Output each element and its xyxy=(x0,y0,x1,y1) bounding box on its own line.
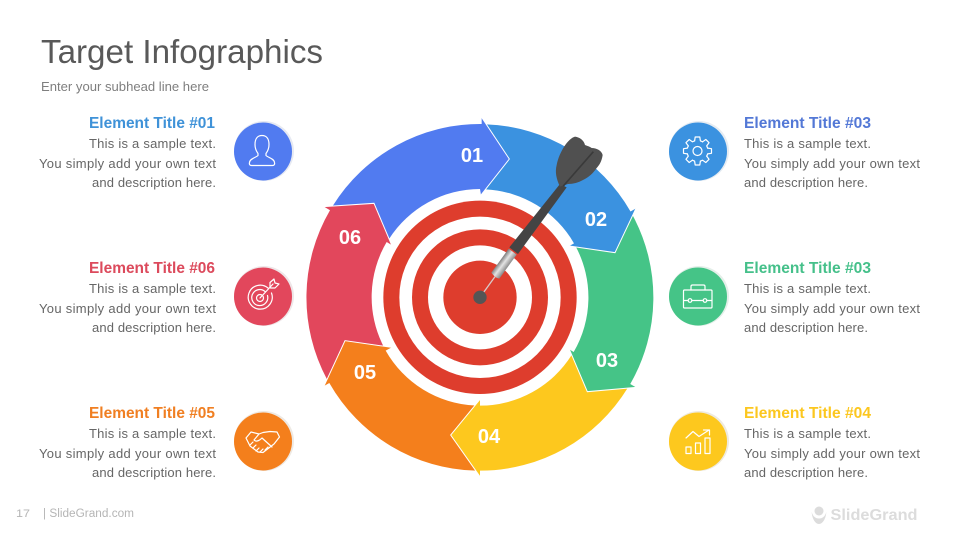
body text 04: You simply add your own text xyxy=(744,446,920,461)
body text 05: You simply add your own text xyxy=(39,446,216,461)
panel: element 03 blue xyxy=(669,115,920,190)
icon: gear xyxy=(669,121,729,181)
body text 03 green: and description here. xyxy=(744,320,868,335)
icon: target xyxy=(234,266,294,326)
body text 01: This is a sample text. xyxy=(89,136,216,151)
body text 04: This is a sample text. xyxy=(744,426,871,441)
segment numbers: 04 xyxy=(478,426,501,448)
footer: page number: 17 xyxy=(16,508,30,520)
arrow segment 05 xyxy=(324,341,476,471)
heading 06: Element Title #06 xyxy=(89,260,215,277)
body text 06: This is a sample text. xyxy=(89,281,216,296)
footer: logo: SlideGrand xyxy=(830,507,918,524)
panel: element 06 xyxy=(39,260,294,335)
body text 03 blue: This is a sample text. xyxy=(744,136,871,151)
footer: site name: | SlideGrand.com xyxy=(43,508,134,520)
panel: element 05 xyxy=(39,405,294,480)
dart xyxy=(473,137,603,304)
icon: handshake xyxy=(234,411,294,471)
target diagram xyxy=(306,117,653,477)
body text 03 blue: and description here. xyxy=(744,175,868,190)
segment numbers: 06 xyxy=(339,227,361,249)
panel: element 01 xyxy=(39,115,294,190)
body text 03 green xyxy=(744,281,920,335)
segment numbers: 05 xyxy=(354,362,376,384)
body text 06: You simply add your own text xyxy=(39,301,216,316)
icon: growth chart xyxy=(669,411,729,471)
bullseye rings xyxy=(383,201,577,394)
subtitle: Enter your subhead line here xyxy=(41,79,209,94)
body text 05: This is a sample text. xyxy=(89,426,216,441)
body text 01 xyxy=(39,136,216,190)
body text 04 xyxy=(744,426,920,480)
arrow segment 01 xyxy=(333,117,509,239)
heading 03 blue: Element Title #03 xyxy=(744,115,871,132)
white disc behind target xyxy=(372,189,588,406)
body text 04: and description here. xyxy=(744,465,868,480)
body text 05: and description here. xyxy=(92,465,216,480)
body text 06: and description here. xyxy=(92,320,216,335)
body text 03 blue xyxy=(744,136,920,190)
segment numbers: 02 xyxy=(585,209,607,231)
arrowhead outlines xyxy=(324,117,636,477)
arrow segment 02 xyxy=(486,124,636,253)
arrow segment 06 xyxy=(306,203,392,379)
panel: element 03 green xyxy=(669,260,920,335)
body text 01: and description here. xyxy=(92,175,216,190)
body text 05 xyxy=(39,426,216,480)
body text 03 blue: You simply add your own text xyxy=(744,156,920,171)
segment numbers xyxy=(339,145,618,448)
arrow segment 03 xyxy=(569,215,653,392)
heading 04: Element Title #04 xyxy=(744,405,871,422)
segment numbers: 01 xyxy=(461,145,483,167)
body text 03 green: This is a sample text. xyxy=(744,281,871,296)
arrow segment 04 xyxy=(451,355,628,477)
body text 01: You simply add your own text xyxy=(39,156,216,171)
body text 06 xyxy=(39,281,216,335)
panel: element 04 xyxy=(669,405,920,480)
title: Target Infographics xyxy=(41,33,323,70)
heading 03 green: Element Title #03 xyxy=(744,260,871,277)
icon: person xyxy=(234,121,294,181)
heading 01: Element Title #01 xyxy=(89,115,215,132)
segment numbers: 03 xyxy=(596,350,618,372)
icon: briefcase xyxy=(669,266,729,326)
heading 05: Element Title #05 xyxy=(89,405,215,422)
body text 03 green: You simply add your own text xyxy=(744,301,920,316)
